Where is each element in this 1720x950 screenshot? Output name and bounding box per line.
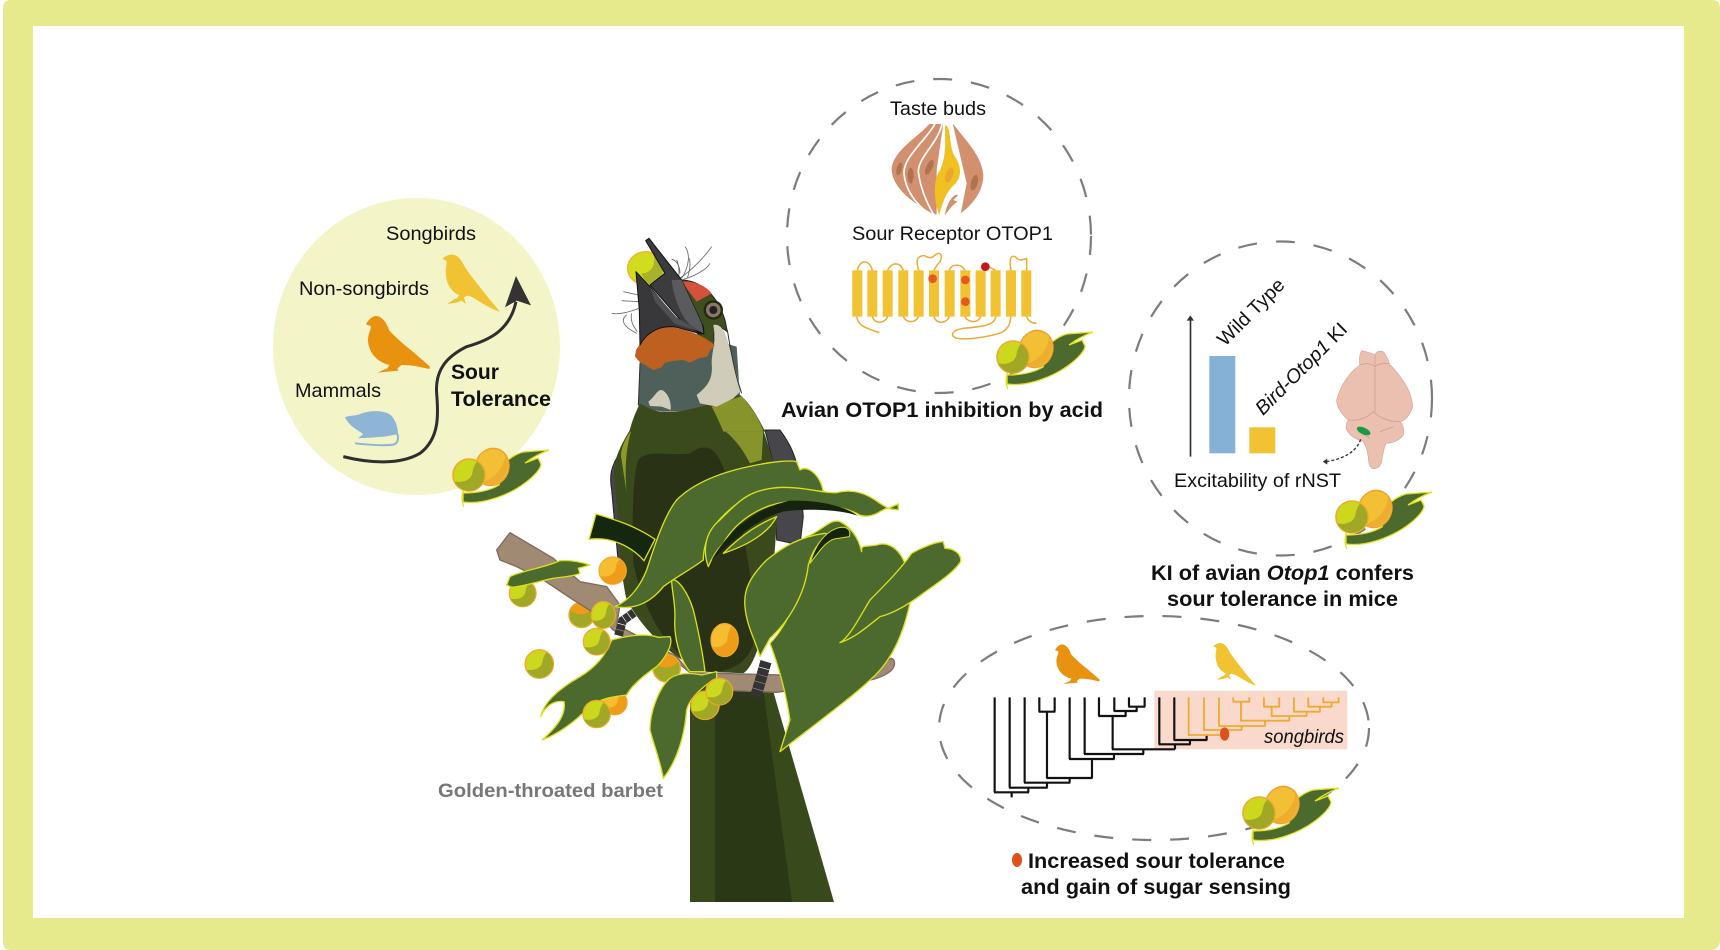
fruits behind leaves bbox=[509, 580, 680, 715]
caption: increased sour tolerance and gain of sugar sensing: Increased sour tolerance bbox=[1028, 849, 1285, 873]
heading: Avian OTOP1 inhibition by acid: Avian OTOP1 inhibition by acid bbox=[781, 398, 1103, 422]
label: Wild Type: Wild Type bbox=[1213, 274, 1289, 351]
icon: songbird bbox=[443, 255, 500, 312]
lower left leaf bbox=[541, 635, 671, 740]
branch bbox=[497, 533, 895, 692]
illustration: mouse brain bbox=[1323, 351, 1413, 469]
label: Mammals: Mammals bbox=[295, 380, 381, 402]
label: Sour Receptor OTOP1: Sour Receptor OTOP1 bbox=[852, 223, 1053, 245]
label: Songbirds: Songbirds bbox=[386, 223, 476, 245]
arrow: sour tolerance trend bbox=[343, 276, 531, 462]
bird feet bbox=[618, 613, 766, 698]
label: songbirds: songbirds bbox=[1264, 727, 1344, 748]
caption: increased sour tolerance and gain of sugar sensing bbox=[1021, 849, 1291, 899]
dark leaf bbox=[589, 514, 655, 561]
label: Sour Tolerance: Sour bbox=[451, 360, 500, 384]
bird body bbox=[614, 430, 777, 673]
label: Sour Tolerance bbox=[451, 360, 551, 411]
bar: Bird-Otop1 KI bbox=[1249, 427, 1275, 453]
dashed circle bbox=[1129, 242, 1432, 556]
thin center leaf bbox=[672, 580, 705, 672]
songbird highlight bbox=[1154, 691, 1347, 749]
dashed circle bbox=[787, 79, 1091, 393]
bird tail bbox=[690, 680, 834, 902]
orange songbird branches bbox=[1188, 697, 1339, 735]
icon: fruit and leaf bbox=[453, 444, 549, 507]
icon: pigeon bbox=[1055, 644, 1100, 684]
curled leaf bbox=[705, 487, 898, 567]
panel: songbird phylogeny bbox=[939, 616, 1369, 899]
bottom leaf bbox=[650, 672, 717, 778]
diagram: OTOP1 transmembrane receptor bbox=[852, 253, 1037, 339]
dashed ellipse bbox=[939, 616, 1369, 840]
far left small leaf bbox=[507, 561, 590, 587]
big top leaf bbox=[615, 461, 823, 607]
lime fruits in front bbox=[525, 602, 733, 728]
inner right leaf bbox=[745, 533, 830, 657]
panel: knock-in mouse experiment bbox=[1129, 242, 1432, 611]
label: Excitability of rNST: Excitability of rNST bbox=[1174, 470, 1341, 492]
label: Non-songbirds: Non-songbirds bbox=[299, 278, 429, 300]
icon: songbird bbox=[1213, 643, 1256, 686]
branch and foliage bbox=[497, 461, 961, 778]
yellow circle background bbox=[273, 198, 560, 495]
heading: KI of avian Otop1 confers sour tolerance in mice: sour tolerance in mice bbox=[1167, 587, 1398, 611]
bird head and throat bbox=[612, 238, 765, 432]
phylogenetic tree bbox=[994, 643, 1347, 797]
bird wings bbox=[611, 430, 803, 600]
panel: avian OTOP1 inhibition bbox=[781, 79, 1103, 422]
icon: mouse bbox=[345, 411, 398, 445]
heading: KI of avian Otop1 confers sour tolerance in mice: KI of avian Otop1 confers bbox=[1151, 561, 1414, 585]
orange fruits bbox=[599, 557, 738, 657]
fruit behind branch bbox=[569, 602, 594, 628]
right finger leaf bbox=[840, 542, 961, 643]
axis arrow bbox=[1187, 315, 1194, 457]
illustration: taste bud cells bbox=[892, 123, 983, 215]
black branches bbox=[994, 697, 1207, 797]
dark leaf slot bbox=[810, 527, 850, 563]
icon: pigeon bbox=[366, 316, 430, 373]
bar: Wild Type bbox=[1209, 356, 1235, 453]
marker: sour tolerance gain bbox=[1220, 727, 1229, 741]
panel: sour tolerance evolution bbox=[273, 198, 560, 507]
icon: fruit and leaf bbox=[1336, 486, 1432, 549]
large right leaf bbox=[770, 521, 911, 752]
icon: fruit and leaf bbox=[997, 326, 1093, 389]
label: Sour Tolerance: Tolerance bbox=[451, 387, 551, 411]
bar chart: excitability of rNST bbox=[1187, 315, 1275, 457]
label: Taste buds: Taste buds bbox=[890, 98, 986, 120]
legend marker bbox=[1012, 853, 1022, 867]
heading: KI of avian Otop1 confers sour tolerance in mice bbox=[1151, 561, 1414, 611]
label: Bird-Otop1 KI: Bird-Otop1 KI bbox=[1251, 318, 1352, 420]
illustration: golden-throated barbet on branch bbox=[438, 238, 961, 902]
caption: Golden-throated barbet: Golden-throated barbet bbox=[438, 780, 664, 802]
icon: fruit and leaf bbox=[1243, 782, 1339, 845]
caption: increased sour tolerance and gain of sugar sensing: and gain of sugar sensing bbox=[1021, 875, 1291, 899]
